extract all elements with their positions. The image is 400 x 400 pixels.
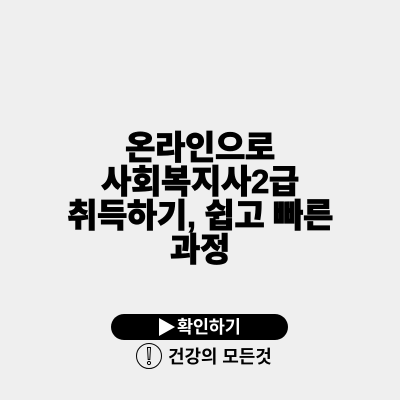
title: 사회복지사2급 <box>101 163 299 200</box>
button: confirm <box>111 314 288 340</box>
site name: 건강의 모든것 <box>168 347 272 367</box>
icon: play triangle <box>159 318 175 336</box>
title: 과정 <box>170 231 230 268</box>
icon: exclamation circle <box>136 343 162 369</box>
title: 취득하기, 쉽고 빠른 <box>67 197 333 234</box>
button label: 확인하기 <box>177 317 241 337</box>
title <box>67 129 333 268</box>
title: 온라인으로 <box>125 129 275 166</box>
